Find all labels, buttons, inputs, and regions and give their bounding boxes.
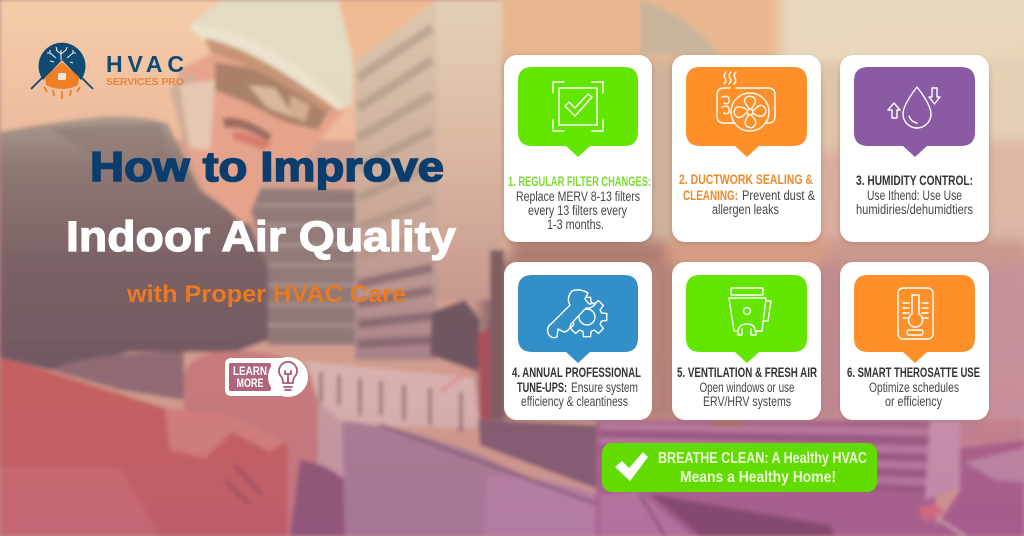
chest AC louvers [245,188,355,345]
card 6 text [847,365,980,409]
card 2 text [679,172,815,217]
AC unit side panel [436,0,502,300]
panel: card 4 tune-ups [504,262,652,420]
subtitle: with Proper HVAC Care [126,281,406,308]
card 1 text: 1-3 months. [547,217,604,232]
card 6 text: or efficiency [885,394,942,409]
card 6 text: Optimize schedules [869,380,959,395]
device and wiring [430,250,504,420]
hard hat [191,0,352,112]
lower right louvers [596,420,1024,536]
icon: check mark [615,452,648,481]
title line 1: How to Improve [90,143,444,190]
learn more button: LEARN [233,364,267,378]
HVAC unit base with slots [290,361,600,536]
title [66,143,456,308]
card shadows [503,56,990,422]
icon: filter check [553,82,603,131]
logo tagline: SERVICES PRO [106,76,184,88]
card 2 text: 2. DUCTWORK SEALING & [679,172,813,187]
card 1 text: every 13 filters every [528,203,627,218]
icon: duct fan [717,72,775,131]
panel: card 3 humidity [840,55,989,242]
panel: card 5 ventilation [672,262,821,420]
card 5 text: ERV/HRV systems [703,394,791,409]
callout bubble: blue [518,275,638,363]
logo [31,43,184,99]
card 4 text: 4. ANNUAL PROFESSIONAL [512,365,641,380]
card 3 text [856,173,973,217]
callout bubble: green [518,67,638,157]
card 4 text [512,365,641,409]
hand and forearm [0,351,318,536]
card 2 text: CLEANING: [683,188,738,203]
panel: card 2 ductwork [672,55,821,242]
panel: card 1 filter changes [504,55,652,242]
card 4 text: efficiency & cleantiness [521,394,628,409]
card 1 text [508,174,651,232]
card 3 text: humidiries/dehumidtiers [856,202,973,217]
card 3 text: Use Ithend: Use Use [867,188,962,203]
icon: thermostat [898,288,933,339]
worker face and neck [170,40,345,225]
card 3 text: 3. HUMIDITY CONTROL: [856,173,973,188]
banner text: Means a Healthy Home! [680,469,836,486]
right side backdrop [480,0,1024,430]
card 1 text: Replace MERV 8-13 filters [516,189,640,204]
icon: water drop and arrows [888,87,940,128]
card 5 text: 5. VENTILATION & FRESH AIR [677,365,817,380]
callout bubble: purple [854,67,975,157]
logo wordmark: HVAC [106,51,184,77]
icon: wrench and gear [548,290,607,338]
logo emblem [31,43,93,99]
card 4 text: TUNE-UPS: [517,380,567,395]
callout bubble: orange [686,67,807,157]
card 2 text: Prevent dust & [742,188,815,203]
card 5 text [677,365,817,409]
icon: ventilation unit [729,288,771,335]
panel: card 6 thermostat [840,262,989,420]
icon: light bulb [279,362,297,390]
callout bubble: green [686,275,807,363]
card 2 text: allergen leaks [712,202,779,217]
card 5 text: Open windows or use [700,380,794,395]
card 1 text: 1. REGULAR FILTER CHANGES: [508,174,651,189]
banner text [658,450,867,486]
learn more button: MORE [236,376,264,390]
banner: breathe clean [602,443,877,492]
card 4 text: Ensure system [571,380,638,395]
callout bubble: orange [854,275,975,363]
title line 2: Indoor Air Quality [66,213,456,261]
learn more button [225,357,308,397]
banner text: BREATHE CLEAN: A Healthy HVAC [658,450,867,467]
worker shirt [0,117,270,370]
